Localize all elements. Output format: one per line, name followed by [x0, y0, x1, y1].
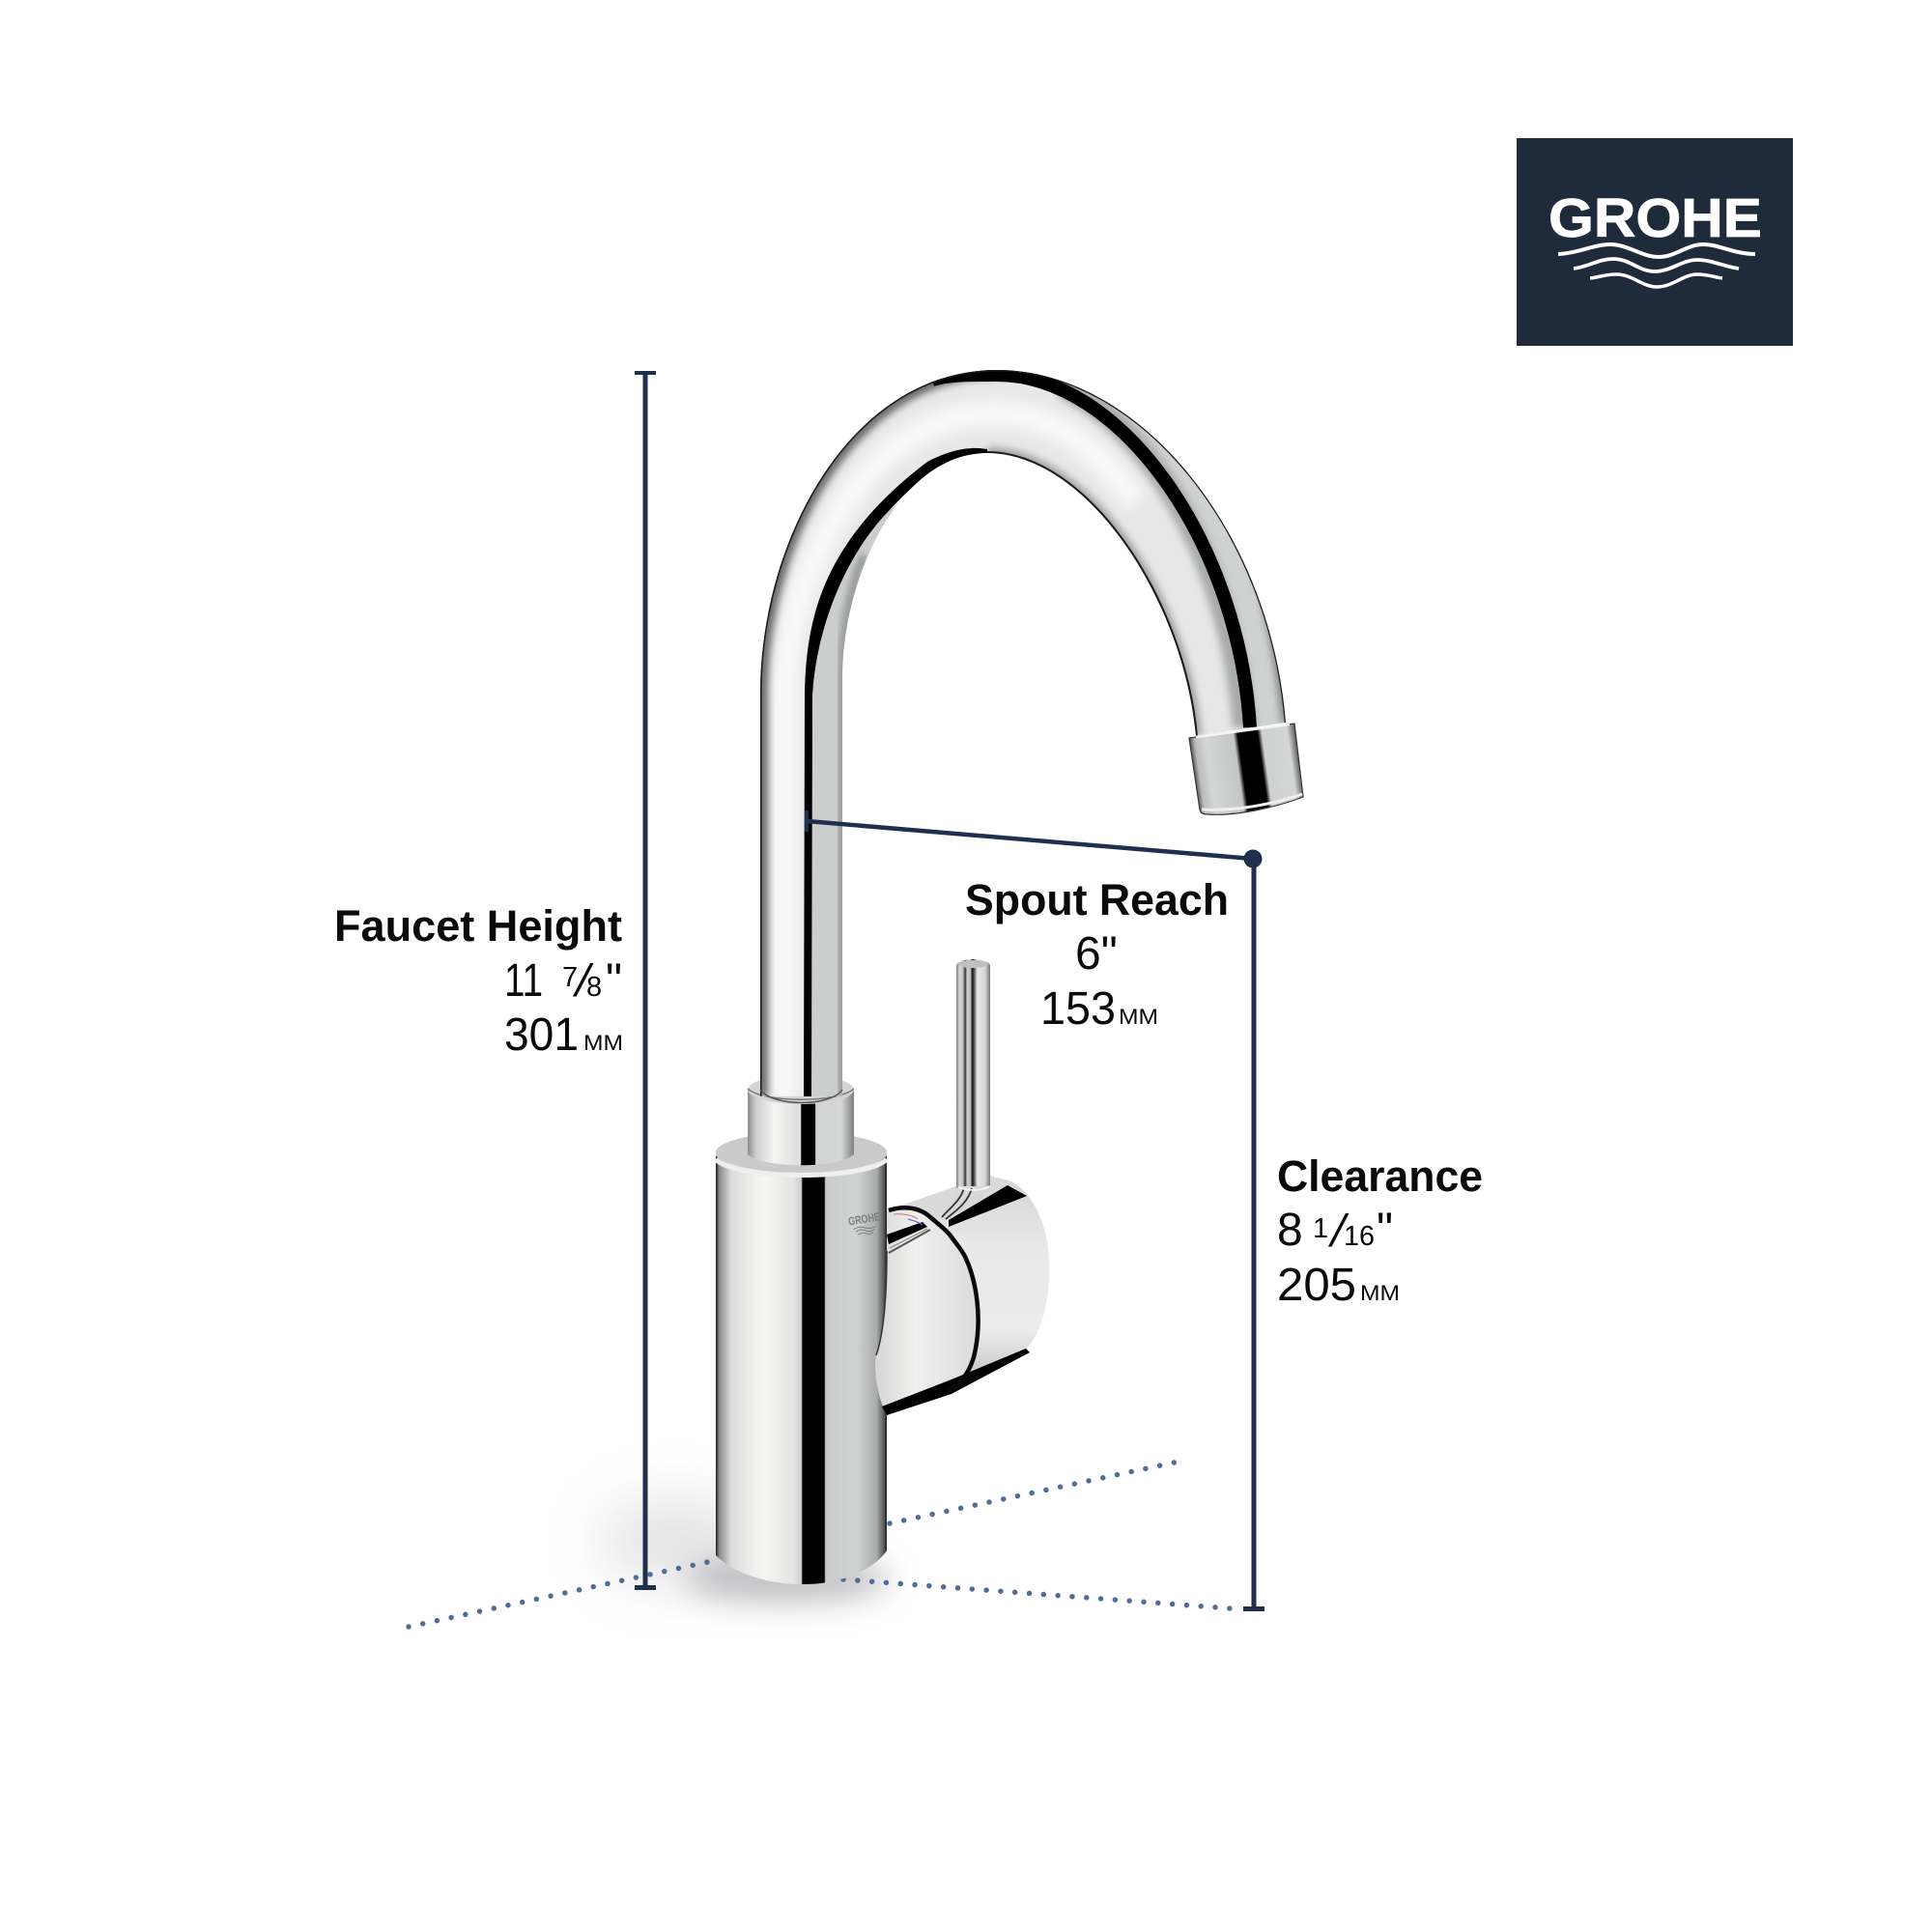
- dotted counter-surface lines: [409, 1463, 1231, 1627]
- label: faucet height: 7: [562, 962, 578, 993]
- engraved logo on body: [847, 1209, 882, 1236]
- engraved logo on body: GROHE: [847, 1209, 881, 1228]
- label: clearance: Clearance: [1277, 1151, 1483, 1201]
- label: faucet height: Faucet Height: [334, 901, 622, 951]
- faucet illustration: [716, 357, 1323, 1584]
- label: faucet height: /: [570, 956, 596, 1007]
- faucet dimension diagram: [337, 138, 1793, 1630]
- faucet height dimension line: [635, 371, 656, 1590]
- label: spout reach: 153: [1040, 983, 1116, 1035]
- label: spout reach: MM: [1119, 1005, 1158, 1029]
- lever handle: [939, 959, 990, 1220]
- base body: [716, 1132, 887, 1584]
- collar: [748, 1075, 854, 1165]
- label: faucet height: 8: [586, 972, 602, 1003]
- logo: GROHE: [1517, 138, 1793, 346]
- handle cylinder: [887, 1176, 1049, 1391]
- nozzle: [1189, 724, 1303, 814]
- spout reach dimension line: [805, 810, 1262, 867]
- label: clearance: /: [1325, 1207, 1351, 1257]
- label: clearance: [1277, 1151, 1483, 1311]
- label: faucet height: 11: [504, 955, 543, 1007]
- handle neck: [875, 1208, 1030, 1415]
- label: faucet height: [334, 901, 623, 1061]
- contact shadow under faucet: [599, 1497, 889, 1604]
- label: spout reach: 6": [1075, 928, 1118, 980]
- label: clearance: 8: [1277, 1205, 1303, 1256]
- label: spout reach: [965, 875, 1229, 1035]
- label: faucet height: 301: [504, 1009, 579, 1061]
- ring at stem base: [760, 1090, 842, 1103]
- label: clearance: 205: [1277, 1260, 1356, 1311]
- label: clearance: ": [1377, 1205, 1393, 1256]
- label: faucet height: ": [606, 955, 622, 1007]
- logo: GROHE: GROHE: [1548, 187, 1762, 249]
- label: clearance: 16: [1344, 1221, 1375, 1252]
- label: clearance: MM: [1360, 1281, 1400, 1305]
- label: spout reach: Spout Reach: [965, 875, 1229, 924]
- label: clearance: 1: [1313, 1213, 1328, 1244]
- label: faucet height: MM: [583, 1031, 623, 1055]
- clearance dimension line: [1243, 859, 1264, 1611]
- spout tube and stem: [760, 370, 1286, 1096]
